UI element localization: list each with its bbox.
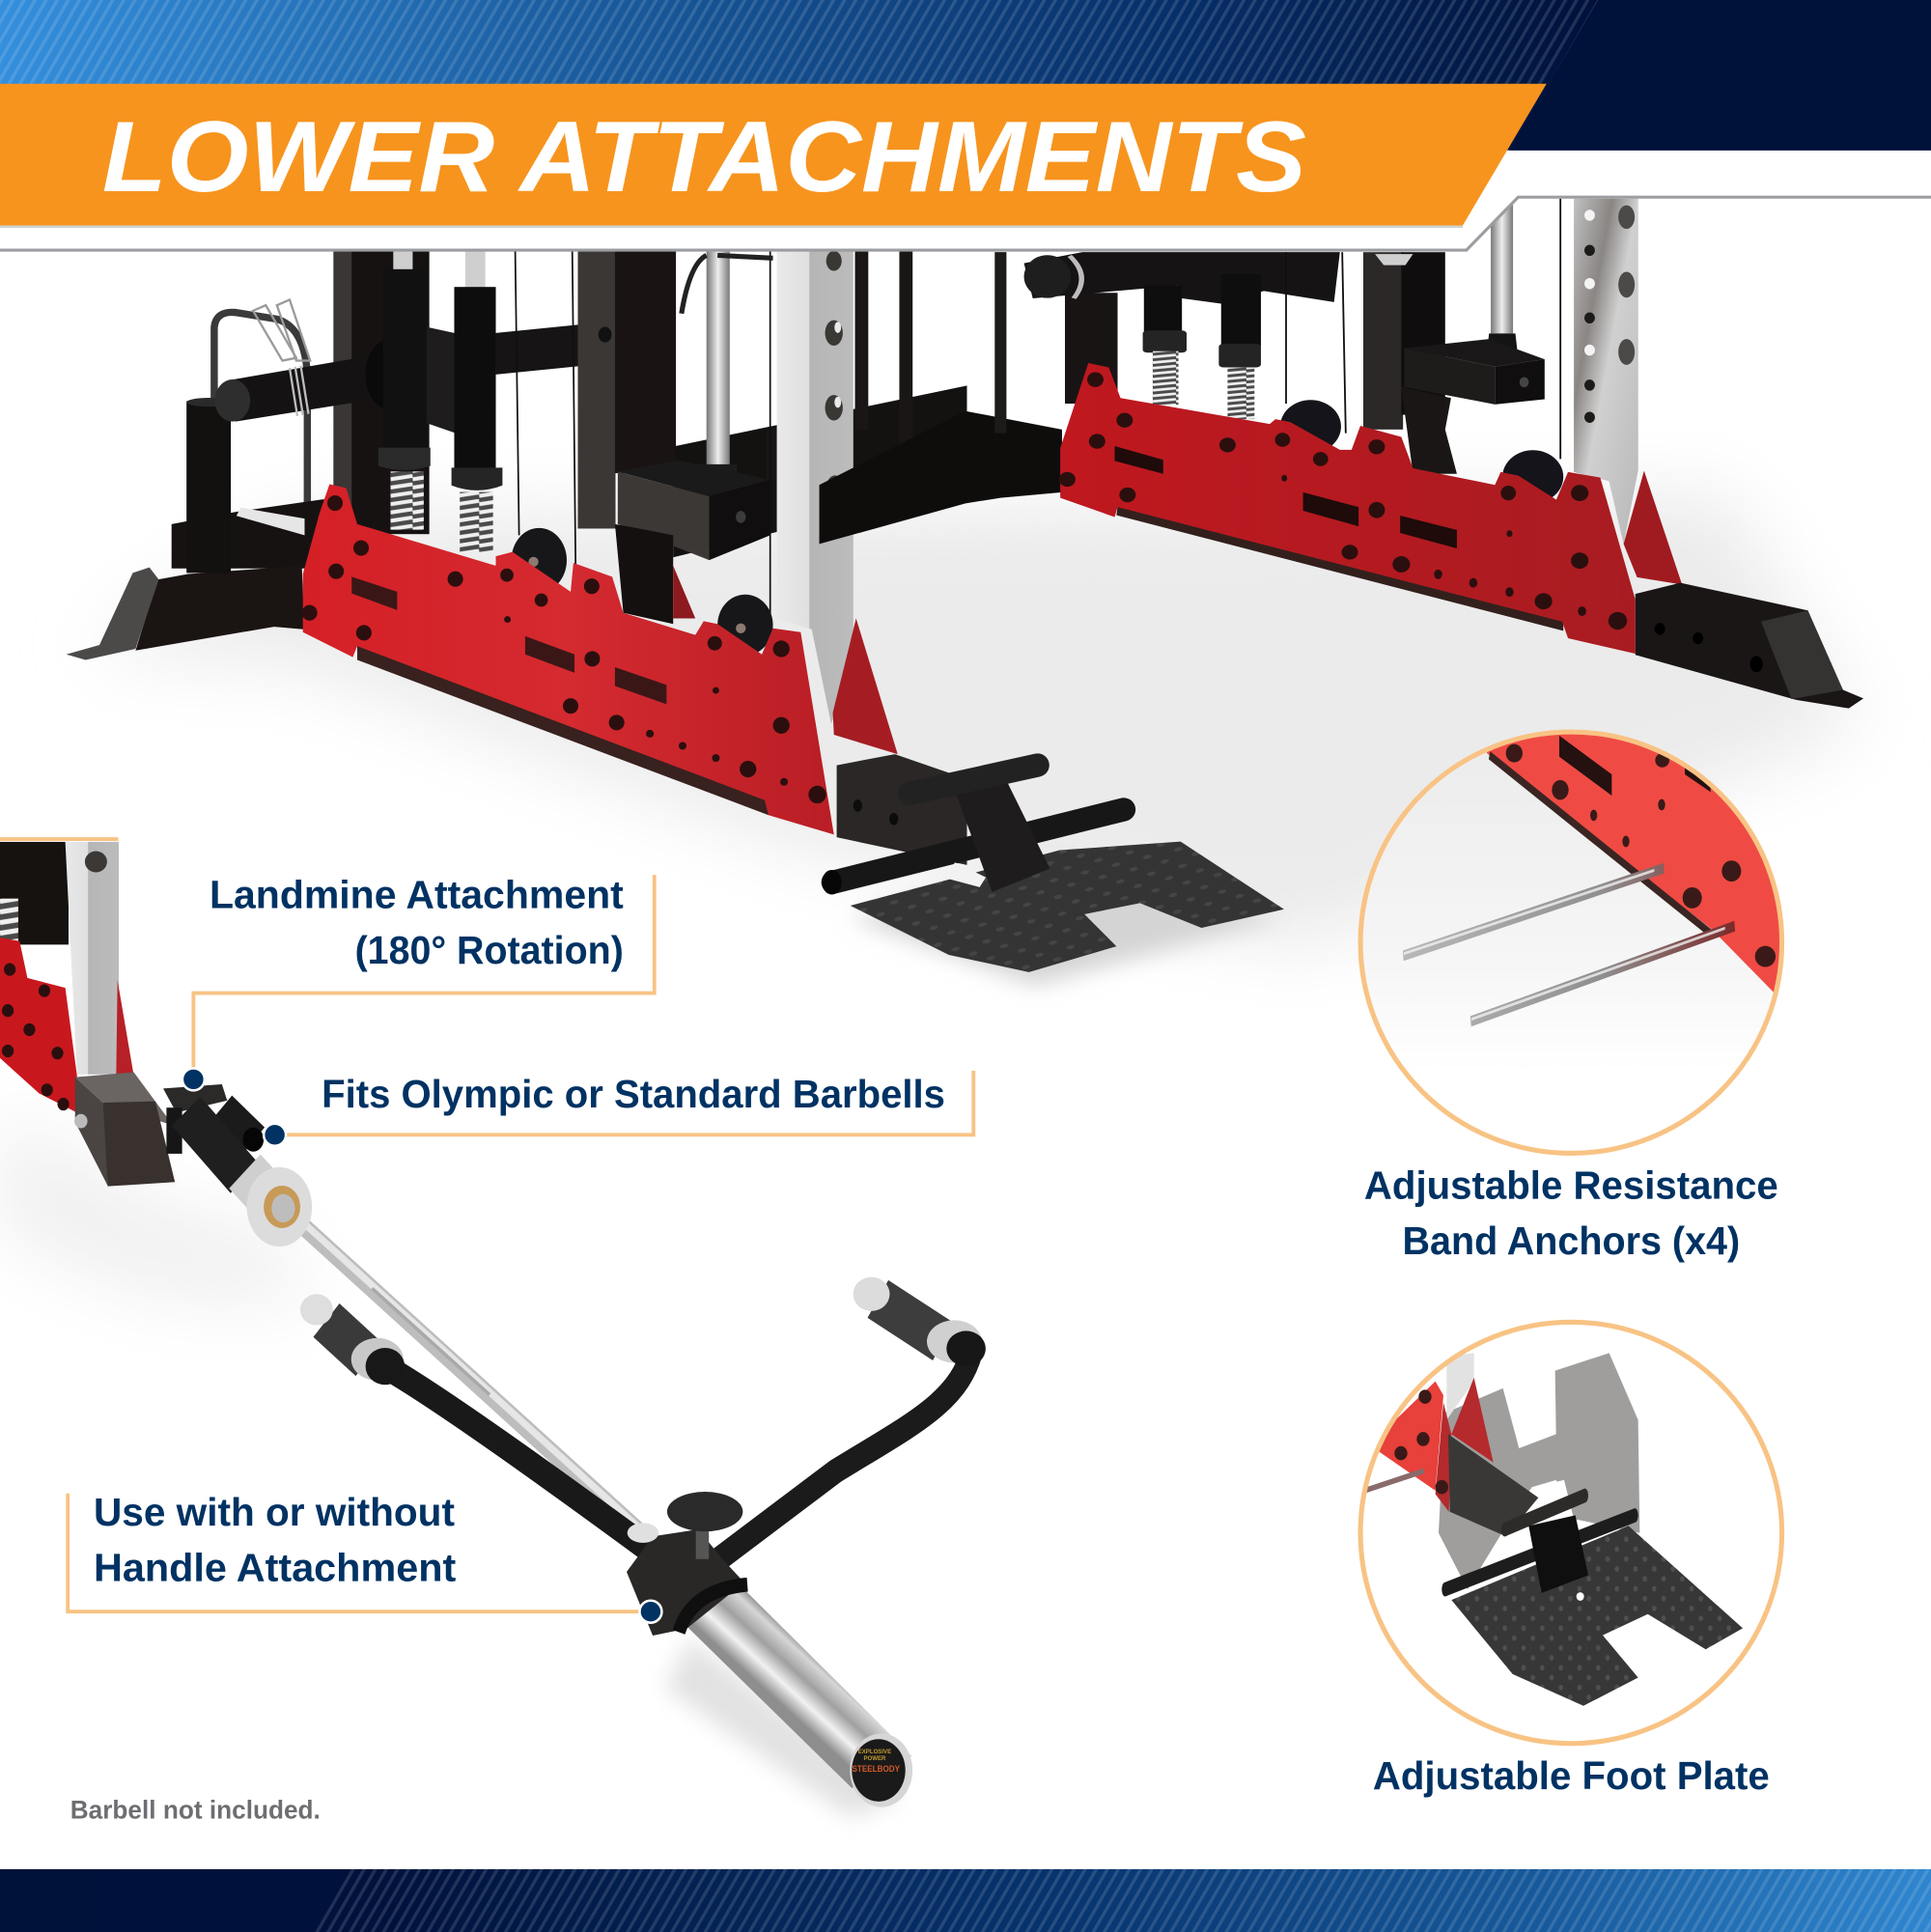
plate slots bbox=[1114, 446, 1457, 548]
bracket bbox=[1528, 1515, 1588, 1593]
chrome guide rod bbox=[698, 251, 737, 492]
sleeve hub bbox=[627, 1492, 747, 1636]
lower dark strip bbox=[1116, 506, 1563, 630]
pulleys bbox=[1280, 400, 1563, 503]
top band bbox=[0, 0, 1931, 151]
footnote: Barbell not included. bbox=[70, 1796, 321, 1825]
circle backdrop bbox=[1402, 848, 1755, 975]
chrome column bbox=[777, 251, 854, 724]
foot plate circle panel bbox=[1352, 1318, 1787, 1750]
callout dots bbox=[182, 1068, 661, 1623]
tube two bbox=[452, 287, 502, 490]
inset beam bbox=[75, 1072, 173, 1126]
label: handle attachment: Use with or without bbox=[94, 1490, 455, 1534]
anchor bolts bbox=[1506, 744, 1776, 967]
back beam bbox=[820, 411, 1062, 544]
cables bbox=[1286, 199, 1560, 459]
handle loop bbox=[214, 312, 307, 518]
tube end bbox=[822, 870, 842, 894]
pulleys bbox=[512, 528, 773, 656]
tube one bbox=[378, 269, 431, 470]
side beam and foot bbox=[1636, 583, 1863, 709]
right machine section bbox=[820, 199, 1863, 709]
pulley hubs bbox=[528, 557, 745, 633]
chrome sleeve bbox=[686, 1586, 912, 1807]
ghost plate bbox=[1439, 1353, 1639, 1589]
label: handle attachment bbox=[94, 1490, 457, 1589]
barbell scene bbox=[0, 842, 986, 1807]
red plate bbox=[1059, 363, 1636, 654]
tread plate bbox=[1451, 1526, 1743, 1706]
inset hole bbox=[85, 851, 107, 872]
rear column bbox=[333, 251, 430, 534]
left machine section bbox=[67, 251, 966, 865]
guide rod bbox=[1486, 201, 1519, 359]
plate bolts bbox=[1059, 373, 1627, 630]
white header cover bbox=[0, 74, 1931, 250]
inset chrome column bbox=[66, 842, 119, 1075]
banner lower edge bbox=[0, 226, 1463, 228]
cables bbox=[516, 251, 770, 630]
label: landmine attachment: Landmine Attachment bbox=[210, 873, 624, 917]
inset beam front bbox=[103, 1102, 175, 1187]
tube one bbox=[1143, 286, 1187, 352]
sleeve end cap: EXPLOSIVE bbox=[858, 1749, 891, 1755]
sleeve end cap: POWER bbox=[863, 1755, 886, 1762]
rod two bbox=[1470, 926, 1735, 1022]
circle outline bbox=[1360, 732, 1782, 1153]
upper bar bbox=[1504, 1496, 1585, 1529]
inset dark frame bbox=[0, 842, 69, 944]
springs bbox=[390, 471, 493, 552]
header rule bbox=[0, 197, 1931, 250]
inset red plate bbox=[0, 938, 77, 1112]
storage clips bbox=[253, 299, 310, 361]
top handle bar bbox=[910, 765, 1038, 794]
label: foot plate: Adjustable Foot Plate bbox=[1373, 1753, 1770, 1798]
tube two bbox=[1218, 274, 1261, 368]
plate bolts bbox=[302, 495, 826, 803]
footer band bbox=[0, 1869, 1931, 1932]
label: band anchors bbox=[1364, 1163, 1778, 1263]
chrome rods bbox=[393, 251, 486, 288]
gap bbox=[1531, 1480, 1556, 1487]
lower dark strip bbox=[357, 645, 769, 815]
upper peg and housing bbox=[1024, 252, 1340, 304]
inset bolts bbox=[2, 963, 70, 1110]
carriage box bbox=[615, 461, 770, 624]
beam bbox=[1436, 1434, 1538, 1536]
plate slots bbox=[1559, 736, 1711, 796]
tread plate bbox=[851, 842, 1284, 972]
peg arm bbox=[214, 319, 579, 433]
sleeve end cap bbox=[852, 1739, 906, 1802]
inset machine bbox=[0, 842, 175, 1187]
title banner bbox=[0, 84, 1547, 226]
label: handle attachment: Handle Attachment bbox=[94, 1545, 457, 1589]
title: LOWER ATTACHMENTS bbox=[102, 101, 1306, 213]
rod bbox=[1364, 1470, 1424, 1491]
springs bbox=[1153, 351, 1254, 419]
handle right arm bbox=[712, 1277, 986, 1565]
red gussets bbox=[1436, 1378, 1494, 1512]
inset bolt bbox=[74, 1114, 88, 1128]
red plate bbox=[302, 485, 834, 834]
chrome column bbox=[1574, 199, 1638, 544]
landmine mount bbox=[163, 1084, 264, 1179]
inset gusset bbox=[116, 980, 134, 1076]
inner curved handle bbox=[682, 255, 773, 314]
rear post bbox=[1065, 293, 1118, 404]
sleeve end cap: STEELBODY bbox=[853, 1764, 900, 1774]
landmine foot plate attachment bbox=[822, 765, 1284, 972]
storage post bbox=[186, 398, 231, 573]
plate dark edge bbox=[1490, 755, 1712, 935]
white gap bbox=[942, 862, 986, 887]
label: barbells: Fits Olympic or Standard Barbells bbox=[322, 1072, 945, 1116]
label: landmine attachment bbox=[210, 873, 624, 972]
circle backdrop bbox=[1356, 1318, 1787, 1750]
inset beam side bbox=[75, 1078, 108, 1186]
side beam bbox=[837, 754, 966, 865]
anchors photo bbox=[1402, 734, 1779, 1027]
upright bracket bbox=[955, 779, 1049, 892]
anchors circle panel bbox=[1357, 730, 1784, 1156]
red gusset bbox=[1624, 471, 1682, 585]
foot bolts bbox=[1394, 1389, 1432, 1460]
chrome stub bbox=[1446, 1353, 1474, 1420]
foot plate photo bbox=[1367, 1354, 1743, 1706]
floor shadow bbox=[0, 492, 1861, 1817]
circle outline bbox=[1360, 1322, 1782, 1744]
red gusset bbox=[833, 618, 898, 754]
label: band anchors: Band Anchors (x4) bbox=[1402, 1218, 1740, 1263]
main post bbox=[1363, 252, 1457, 474]
rod one bbox=[1403, 868, 1664, 956]
left back upright bbox=[991, 252, 1010, 434]
anchor plate bbox=[1487, 734, 1779, 993]
floor frame bbox=[172, 499, 324, 569]
main post bbox=[577, 251, 676, 528]
back frame beam bbox=[673, 385, 966, 557]
lower tube bbox=[833, 809, 1124, 882]
slot bbox=[1577, 1592, 1584, 1601]
plate slots bbox=[351, 576, 666, 704]
barbell shaft bbox=[282, 1203, 646, 1538]
inset spring bbox=[0, 899, 18, 941]
handle left arm bbox=[300, 1294, 679, 1572]
lower tube bbox=[1445, 1515, 1635, 1589]
carriage box bbox=[1404, 339, 1545, 405]
foot red plate bbox=[1379, 1381, 1443, 1491]
barbell collar bbox=[245, 1167, 312, 1246]
callout lines bbox=[0, 839, 973, 1611]
back uprights bbox=[773, 251, 906, 480]
label: landmine attachment: (180° Rotation) bbox=[355, 928, 624, 972]
frame gaps bbox=[237, 508, 304, 535]
label: band anchors: Adjustable Resistance bbox=[1364, 1163, 1778, 1208]
left foot bbox=[67, 566, 304, 660]
